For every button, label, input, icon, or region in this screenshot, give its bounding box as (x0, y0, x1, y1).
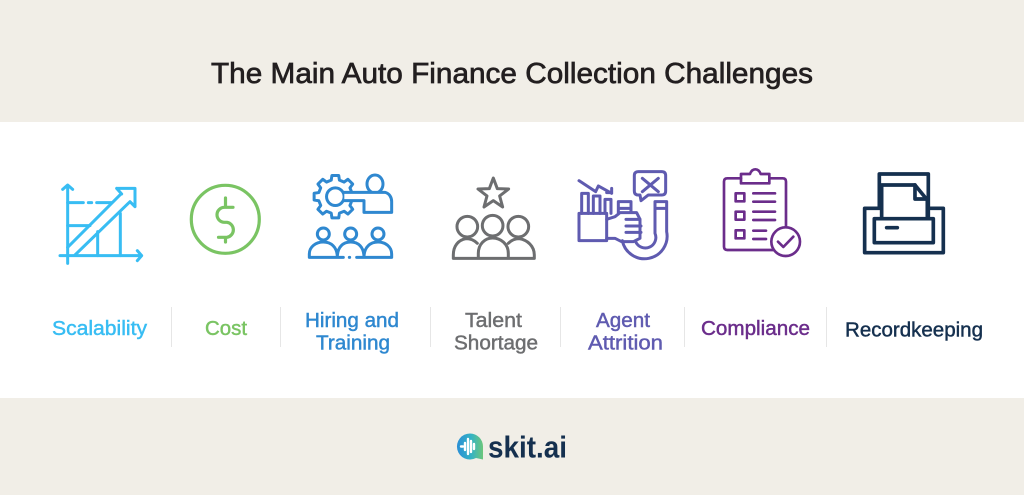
icon: scalability chart with rising arrow (60, 185, 142, 263)
logo wordmark: skit.ai (488, 430, 567, 464)
label: Talent Shortage (454, 310, 538, 354)
label: Hiring and Training: Training (316, 332, 390, 354)
label: Hiring and Training (305, 310, 399, 354)
label: Hiring and Training: Hiring and (305, 310, 399, 332)
label: Compliance: Compliance (701, 318, 810, 340)
logo mark: speech bubble with waveform (457, 433, 483, 460)
label: Scalability: Scalability (52, 318, 147, 340)
icon: recordkeeping file tray (865, 174, 943, 253)
label: Recordkeeping: Recordkeeping (845, 320, 983, 342)
label: Agent Attrition: Agent (596, 310, 650, 332)
label: Talent Shortage: Talent (465, 310, 522, 332)
logo: skit.ai (457, 430, 567, 464)
icon: compliance clipboard with check (724, 169, 800, 256)
icon: hiring and training team with gear (309, 175, 392, 257)
icon: agent attrition magnet and falling chart (579, 172, 667, 259)
title: The Main Auto Finance Collection Challenges (211, 58, 813, 90)
icon: talent shortage star over group (453, 178, 534, 258)
label: Agent Attrition (588, 310, 663, 354)
label: Agent Attrition: Attrition (588, 332, 663, 354)
icon: dollar coin (191, 185, 259, 253)
footer band (0, 398, 1024, 495)
header band (0, 0, 1024, 122)
label: Talent Shortage: Shortage (454, 332, 538, 354)
label: Cost: Cost (205, 318, 247, 340)
